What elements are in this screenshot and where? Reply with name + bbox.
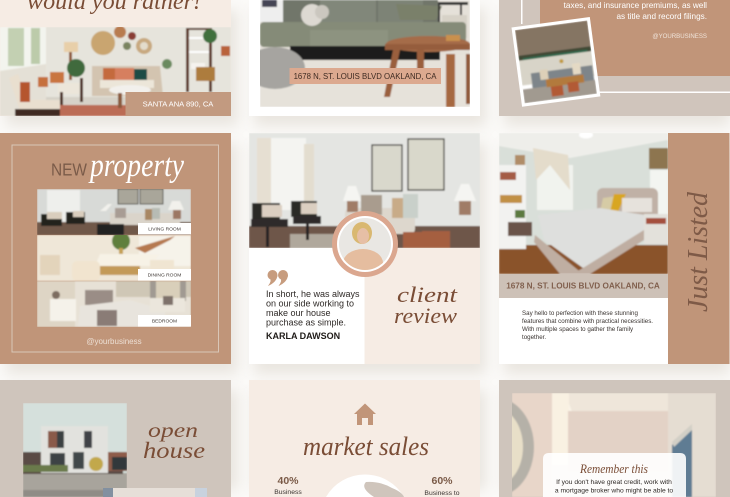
photo: bedroom [37,281,191,327]
note card: a mortgage broker who might be able to [555,488,673,494]
panel: new property [0,133,231,364]
note card [543,453,686,497]
icon: house [354,404,376,425]
pie chart [326,474,404,497]
testimonial text: purchase as simple. [266,318,346,328]
address band [499,274,668,298]
icon: quote mark [268,270,288,286]
portrait circle [332,211,398,277]
heading: new property [51,148,184,184]
heading: new property: NEW [51,160,87,180]
description text: together. [522,334,546,341]
testimonial text: In short, he was always [266,289,360,299]
side panel with vertical heading: Just Listed [683,191,714,312]
side panel with vertical heading [668,133,730,364]
description text [522,310,653,341]
polaroid photo [512,17,600,107]
description text: With multiple spaces to gather the family [522,326,634,333]
photo: hallway with mirror [512,393,716,497]
tan text block: taxes, and insurance premiums, as well [564,1,707,10]
panel: just listed [499,132,730,364]
room labels: BEDROOM [152,318,177,324]
note card: Remember this [579,462,648,476]
testimonial text: make our house [266,308,331,318]
room labels [138,223,191,326]
description text: Say hello to perfection with these stunning [522,310,638,317]
caption: santa ana [126,92,231,116]
tan text block: as title and record filings. [616,12,707,21]
heading: open house: open [148,418,198,442]
tan text block [540,0,730,76]
address label [290,68,441,84]
panel: client review [249,133,480,364]
room labels: DINING ROOM [148,272,181,278]
photo: dining room [37,232,191,281]
panel: taxes note [499,0,730,116]
caption: santa ana: SANTA ANA 890, CA [143,100,214,108]
photo: interior, partly cut off [103,488,207,497]
photo: boho living room [0,26,231,116]
panel: remember this [499,380,730,497]
photo: modern house [23,403,127,497]
panel: oakland sofa photo [245,0,480,116]
handle: @yourbusiness [86,337,142,346]
heading: client review [394,282,458,328]
heading: open house [143,418,205,463]
testimonial text: KARLA DAWSON [266,331,340,341]
heading: new property: property [88,148,184,184]
testimonial text [266,289,360,341]
photo: living room [37,189,191,235]
stat: 40 percent [274,475,302,496]
photo: bedroom with bed [499,132,668,274]
photo: green sofa [245,0,470,107]
address band: 1678 N, ST. LOUIS BLVD OAKLAND, CA [506,282,660,290]
room labels: LIVING ROOM [148,226,181,232]
heading: client review: client [397,282,458,307]
stat: 60 percent: 60% [431,475,453,487]
stat: 60 percent: Business to [424,490,460,497]
panel: market sales [249,380,480,497]
address label: 1678 N, ST. LOUIS BLVD OAKLAND, CA [294,72,437,81]
heading: market sales: market sales [303,432,429,461]
tan text block: @YOURBUSINESS [652,33,707,40]
panel: would you rather [0,0,231,116]
stat: 60 percent [424,475,460,497]
heading: client review: review [394,303,457,328]
description text: features that combine with practical necessities. [522,318,653,325]
panel: open house [0,380,231,497]
photo: white living room [249,133,480,248]
testimonial text: on our side working to [266,298,354,308]
note card: If you don't have great credit, work with [556,479,672,486]
heading: open house: house [143,438,205,463]
stat: 40 percent: 40% [277,475,299,487]
stat: 40 percent: Business [274,489,302,496]
